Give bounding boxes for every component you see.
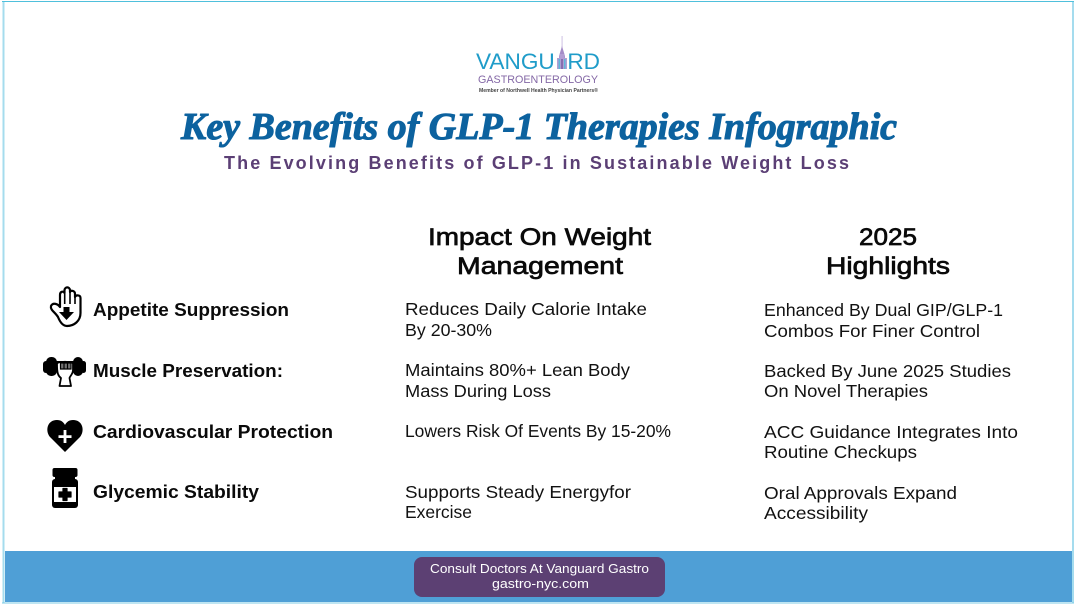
highlight text: muscle xyxy=(764,361,1011,401)
row: Glycemic Stability xyxy=(52,468,957,523)
icon: fist lifting dumbbell xyxy=(43,357,86,386)
highlight text: cardiovascular: Routine Checkups xyxy=(764,442,917,462)
impact text: glycemic: Supports Steady Energyfor xyxy=(405,482,631,502)
impact text: appetite xyxy=(405,299,647,340)
column heading: Impact On Weight Management: Impact On Weight xyxy=(428,224,651,251)
highlight text: cardiovascular: ACC Guidance Integrates Into xyxy=(764,422,1018,442)
title: Key Benefits of GLP-1 Therapies Infographic xyxy=(180,106,897,148)
logo: Vanguard Gastroenterology: VANGU RD xyxy=(476,49,600,74)
impact text: cardiovascular: Lowers Risk Of Events By 15-20% xyxy=(405,421,671,441)
logo: Vanguard Gastroenterology: GASTROENTEROLOGY xyxy=(478,74,599,86)
column heading: 2025 Highlights: 2025 xyxy=(859,224,917,251)
logo: Vanguard Gastroenterology xyxy=(476,36,600,94)
impact text: glycemic xyxy=(405,482,631,522)
highlight text: appetite: Combos For Finer Control xyxy=(764,321,980,341)
column heading: 2025 Highlights: Highlights xyxy=(826,253,950,280)
highlight text: appetite xyxy=(764,300,1003,341)
icon: heart with plus xyxy=(47,420,83,452)
label: Appetite Suppression: Appetite Suppression xyxy=(93,299,289,320)
impact text: appetite: Reduces Daily Calorie Intake xyxy=(405,299,647,319)
logo: Vanguard Gastroenterology: Member of Northwell Health Physician Partners® xyxy=(479,87,598,94)
impact text: muscle: Maintains 80%+ Lean Body xyxy=(405,360,630,380)
call to action button: Consult Doctors At Vanguard Gastro xyxy=(430,561,649,576)
column heading: Impact On Weight Management xyxy=(428,224,651,280)
highlight text: muscle: On Novel Therapies xyxy=(764,381,928,401)
highlight text: muscle: Backed By June 2025 Studies xyxy=(764,361,1011,381)
footer band xyxy=(5,551,1072,602)
call to action button: gastro-nyc.com xyxy=(492,576,589,591)
label: Glycemic Stability: Glycemic Stability xyxy=(93,481,260,502)
row: Muscle Preservation xyxy=(43,357,1011,401)
impact text: muscle: Mass During Loss xyxy=(405,381,551,401)
impact text: appetite: By 20-30% xyxy=(405,320,492,340)
impact text: glycemic: Exercise xyxy=(405,502,472,522)
call to action button xyxy=(414,557,665,597)
column heading: 2025 Highlights xyxy=(826,224,950,280)
label: Muscle Preservation: Muscle Preservation: xyxy=(93,360,283,381)
label: Cardiovascular Protection: Cardiovascular Protection xyxy=(93,421,333,442)
row: Appetite Suppression xyxy=(51,287,1003,341)
subtitle: The Evolving Benefits of GLP-1 in Sustainable Weight Loss xyxy=(224,153,849,173)
highlight text: glycemic: Oral Approvals Expand xyxy=(764,483,957,503)
highlight text: glycemic: Accessibility xyxy=(764,503,868,523)
highlight text: appetite: Enhanced By Dual GIP/GLP-1 xyxy=(764,300,1003,320)
highlight text: glycemic xyxy=(764,483,957,523)
highlight text: cardiovascular xyxy=(764,422,1018,462)
icon: Empire State tower in logo xyxy=(557,36,567,69)
icon: hand with down arrow xyxy=(51,287,80,326)
row: Cardiovascular Protection xyxy=(47,420,1018,462)
column heading: Impact On Weight Management: Management xyxy=(457,253,623,280)
icon: medicine bottle xyxy=(52,468,78,508)
impact text: muscle xyxy=(405,360,630,401)
